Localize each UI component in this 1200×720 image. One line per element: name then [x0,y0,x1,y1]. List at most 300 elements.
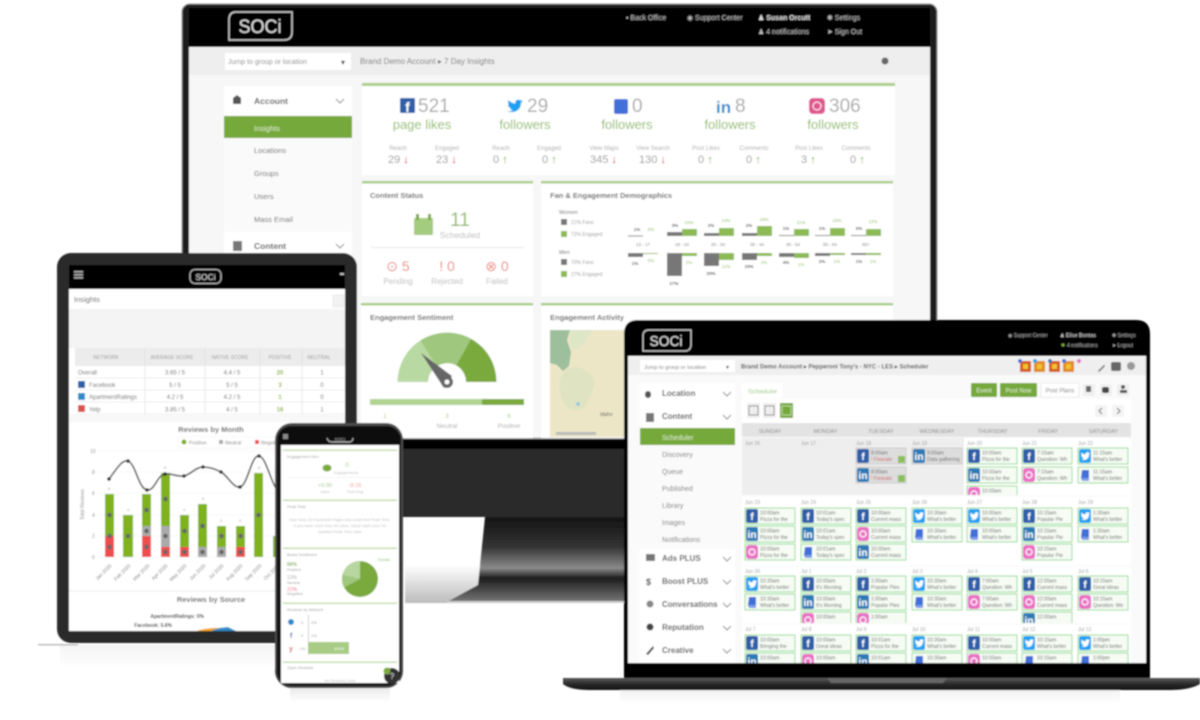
calendar week 1: Pizza for the [982,476,1010,482]
laptop sidebar: Creative [662,646,694,655]
tablet score table: NETWORK [93,355,119,361]
panel: content status: Pending [383,277,413,286]
laptop sidebar: $ [646,577,651,587]
panel: social stats: 0 ↑ [850,154,865,166]
panel: social stats: Engaged [435,146,459,152]
demographics labels: 27% [669,281,679,286]
calendar week 2: 10:00am [982,528,1001,534]
calendar week 4: 10:15am [1037,656,1056,662]
demographics labels: 2% [708,223,714,228]
tablet score table: Facebook [89,383,116,389]
calendar week 4: What's better [1037,644,1067,650]
tablet insights title [69,295,345,348]
chart month labels: Jan 2020 [95,563,114,582]
demographics labels: 13 - 17 [636,242,650,247]
calendar week 2: 10:01am [816,510,835,516]
tablet score table: 4.4 / 5 [224,370,241,376]
panel: social stats: 345 ↓ [590,154,617,166]
phone sentiment section: Positive [287,567,302,572]
demographics legend: Men [559,250,570,256]
tablet insights title: Insights [74,295,100,304]
tablet score table: POSITIVE [268,355,292,361]
chart axis: 6 [92,491,95,497]
demographics labels: 1% [783,226,789,231]
phone sentiment section: 13% [287,575,298,581]
calendar week 1: ! Fixscale [871,476,892,482]
tablet score table: 4 / 5 [226,408,238,414]
panel: social stats: Comments [841,146,871,152]
panel: social stats: 29 [527,96,548,117]
demographics labels: 15% [832,218,842,223]
laptop logo [643,330,691,351]
panel: social stats: followers [807,117,859,132]
calendar week 3: What's better [760,585,790,591]
chart legend: Positive [189,440,207,446]
calendar week 4: What's better [1093,644,1123,650]
calendar week 2: What's better [982,517,1012,523]
calendar week 2: Jun 26 [912,500,927,506]
calendar week 4: in [859,657,867,668]
calendar week 1: in [915,452,923,463]
calendar week 1: 7:15am [1037,450,1054,456]
phone reviews by network section [283,602,397,655]
demographics labels: 0% [648,258,654,263]
phone engagement section: Post Eng [347,489,363,494]
activity map [550,330,630,437]
laptop sidebar: Discovery [662,452,693,459]
panel: content status: ⊙ 5 [386,258,410,274]
panel: engagement activity [541,303,893,438]
chart bars: 8 [164,465,167,470]
phone peak time section: updated Peak Time data. [318,529,362,534]
calendar week 3: f [1083,580,1087,591]
phone engagement section: Engagements [334,470,358,475]
demographics legend: Women [559,210,578,216]
demographics labels: 2% [686,260,692,265]
phone reviews by network section: 0 [301,633,304,638]
laptop sidebar: Notifications [662,537,701,544]
phone reviews by network section: y [289,646,293,653]
monitor sidebar: Mass Email [254,215,293,224]
chart month labels: Apr 2020 [151,563,170,582]
demographics labels: 65+ [862,242,870,247]
calendar header row: SUNDAY [759,429,782,435]
calendar week 3: Jul 5 [1022,569,1033,575]
calendar week 3: What's better [760,603,790,609]
chart bars: 5 [202,496,205,501]
tablet score table: 5 / 5 [226,383,238,389]
panel: social stats: 0 [632,96,643,117]
chart month labels: Jul 2020 [208,563,226,581]
demographics legend [559,210,603,278]
panel: social stats: page likes [393,117,452,132]
calendar week 1: 8:00am [871,450,888,456]
demographics labels: 3% [672,223,678,228]
calendar week 3: 12:00am [1037,614,1056,620]
phone sentiment section: Brand Sentiment [287,552,318,557]
sentiment pie [342,561,378,597]
calendar week 2: 10:00am [760,528,779,534]
monitor sidebar: Content [254,241,286,251]
phone header: SOCi [335,437,345,442]
laptop alert icons [1018,359,1135,372]
calendar week 4: f [861,639,865,650]
calendar week 2: Current mass [871,535,902,541]
calendar week 2: f [1027,512,1031,523]
demographics labels: 45 - 54 [786,242,800,247]
phone sentiment section: 21% [287,587,298,593]
calendar week 3: f [861,580,865,591]
laptop sidebar: Boost PLUS [662,577,709,586]
panel: social stats: Post Likes [692,146,720,152]
panel: social stats: followers [704,117,756,132]
tablet score table: 4.2 / 5 [224,395,241,401]
tablet score table: 1 [278,395,282,401]
calendar week 2: 1:30am [1093,510,1110,516]
chart bars: 3 [239,518,242,523]
calendar week 4: Jul 7 [745,627,756,633]
laptop sidebar: Ads PLUS [662,554,701,563]
breadcrumb band [189,48,930,75]
calendar week 3: Jul 2 [856,569,867,575]
calendar week 3: 10:30am [927,578,946,584]
demographics labels: 1% [798,262,804,267]
calendar week 2: Today's spec [816,535,845,541]
calendar header row [742,423,1131,437]
tablet [57,253,357,643]
phone reviews by network section: f [290,633,293,640]
calendar week 2: Jun 27 [967,500,982,506]
calendar header row: FRIDAY [1038,429,1058,435]
calendar week 2: f [750,512,754,523]
monitor stand [405,517,650,603]
calendar week 3: f [1027,580,1031,591]
phone peak time section: If you have more than 30 Likes, check back soon for [294,523,387,528]
calendar week 3: Popular Pies [871,585,900,591]
calendar week 1: Jun 21 [1022,441,1037,447]
tablet score table: 0 [320,395,324,401]
calendar week 4: What's better [927,644,957,650]
calendar week 1: 11:15am [1093,450,1112,456]
monitor sidebar: Locations [254,146,286,155]
phone engagement section: 0 [345,463,349,469]
calendar week 2: 1:30am [1093,528,1110,534]
chart bars: 8 [258,465,261,470]
scheduler toolbar: Post Plans [1046,388,1074,394]
phone engagement section: +0.00 [318,483,332,489]
chart month labels: Feb 2020 [113,563,133,582]
calendar week 4: Jul 8 [801,627,812,633]
laptop sidebar: Conversations [662,600,718,609]
calendar week 2: 10:00am [982,510,1001,516]
monitor top navigation: ➤ Sign Out [827,29,862,36]
demographics labels: 2% [819,259,825,264]
calendar week 3: f [972,580,976,591]
calendar week 4: 10:01am [871,638,890,644]
panel: social stats: 23 ↓ [436,154,457,166]
calendar week 3: Jul 6 [1078,569,1089,575]
calendar week 2: 10:15am [1037,510,1056,516]
laptop breadcrumb band [628,357,1146,375]
breadcrumb band: Jump to group or location [228,59,307,66]
chart legend: Negative [261,440,281,446]
calendar week 4: Jul 12 [1022,627,1036,633]
panel: social stats: 0 ↑ [493,154,508,166]
panel: content status: ! 0 [439,258,455,274]
calendar week 2: Pizza for the [760,553,788,559]
phone engagement section [283,450,397,494]
calendar week 4: in [748,657,756,668]
calendar week 2: What's better [1093,535,1123,541]
phone reviews by network section: +31 [299,646,307,651]
calendar week 3: Jun 30 [745,569,760,575]
chart axis: 10 [90,449,96,455]
calendar week 3: Current mass [1037,603,1068,609]
tablet score table: 0 [320,383,324,389]
calendar week 1: 8:00am [871,470,888,476]
panel: content status: 11 [450,210,470,231]
chart axis [80,449,338,561]
calendar week 3: Jul 4 [967,569,978,575]
calendar week 4: 10:00am [816,656,835,662]
monitor sidebar: Insights [254,124,280,133]
tablet frame [57,253,357,643]
calendar week 2: Today's spec [816,553,845,559]
calendar week 4: 10:00am [982,638,1001,644]
panel: social stats: Post Likes [795,146,823,152]
calendar week 2: f [861,512,865,523]
panel: social stats: 0 ↑ [698,154,713,166]
calendar week 3: 10:30am [760,596,779,602]
phone reviews by network section: 0% [311,620,317,625]
calendar week 4 [744,626,1129,664]
demographics labels: 4% [783,260,789,265]
calendar week 4: f [972,639,976,650]
laptop sidebar: Scheduler [662,435,694,442]
demographics labels: 15% [744,264,754,269]
tablet score table: 3 [278,383,282,389]
phone help button [384,668,400,684]
demographics labels: 1% [834,259,840,264]
laptop breadcrumb band: ▾ [726,365,729,371]
phone reviews by network section: Reviews by Network [287,607,323,612]
laptop sidebar [640,383,735,663]
calendar header row: THURSDAY [978,429,1008,435]
phone reviews by network section: 100% [334,646,344,651]
calendar week 2: Jun 29 [1078,500,1093,506]
calendar week 2: Popular Pie [1037,517,1063,523]
calendar week 2: Current mass [871,517,902,523]
calendar week 3: 10:30am [760,578,779,584]
tablet score table: 3.65 / 5 [165,370,186,376]
demographics legend: 72% Engaged [571,232,603,238]
calendar week 2 [742,497,1131,565]
calendar week 1: Data gathering [927,457,960,463]
laptop breadcrumb band: Jump to group or location [644,365,706,371]
laptop breadcrumb band: Brand Demo Account ▸ Pepperoni Tony's - NYC - LES ▸ Scheduler [741,364,929,370]
tablet score table: 16 [277,408,284,414]
sentiment gauge [398,333,496,388]
calendar week 2: 10:15am [1037,528,1056,534]
chart month labels: Sep 2020 [244,563,264,583]
calendar week 4: Jul 9 [856,627,867,633]
calendar week 3: in [1025,616,1033,627]
phone sentiment section: Neutral [287,580,300,585]
chart axis: 0 [92,555,95,561]
tablet score table: ApartmentRatings [89,395,137,401]
calendar week 2: 10:00am [871,528,890,534]
calendar week 3: 1:00am [871,578,888,584]
calendar week 2: Jun 25 [856,500,871,506]
phone header [283,434,353,442]
phone open reviews section: No Reviews Data [325,678,356,683]
chart bars [105,465,282,557]
phone sentiment section: Negative [287,591,304,596]
panel: social stats: Engaged [537,146,561,152]
phone engagement section: -0.15 [349,483,361,489]
calendar week 4: 10:30am [927,638,946,644]
calendar week 4: Great ideas [816,644,842,650]
calendar week 1: f [972,452,976,463]
calendar week 3: 7:00am [982,596,999,602]
demographics labels: 0% [856,226,862,231]
phone engagement section: Likes [320,489,330,494]
calendar week 3: 10:00am [816,596,835,602]
laptop top navigation: ✱ Settings [1112,333,1136,339]
scheduler toolbar: Scheduler [748,388,778,396]
calendar week 2: Current mass [871,553,902,559]
calendar week 3: It's Morning [816,603,842,609]
calendar week 1: Jun 20 [967,441,982,447]
scheduler toolbar: Event [976,388,992,394]
chart: reviews by month [75,422,345,585]
laptop top navigation: 4 notifications [1067,343,1098,349]
laptop sidebar: Library [662,503,684,510]
calendar week 1: Question: Wh [1037,457,1068,463]
monitor top navigation: ◉ Support Center [687,15,743,22]
activity map: Idaho [600,412,613,418]
laptop top navigation: ➤ Logout [1112,343,1133,349]
panel: social stats: Reach [492,146,510,152]
calendar week 3: in [804,598,812,609]
calendar week 1: Jun 18 [856,441,871,447]
panel: fan and engagement demographics [541,181,893,296]
panel: social stats: 29 ↓ [388,154,409,166]
calendar week 2: 10:15am [1037,546,1056,552]
demographics labels: 25 - 34 [711,242,725,247]
demographics labels: 15% [684,220,694,225]
calendar week 2: in [748,530,756,541]
calendar week 3: 12:00am [1037,596,1056,602]
calendar week 1: What's better [1093,476,1123,482]
demographics labels: 12% [868,219,878,224]
demographics bars [628,226,881,276]
laptop top navigation: ◉ Support Center [1008,333,1048,339]
calendar week 3: in [859,598,867,609]
calendar week 2: 10:30am [927,510,946,516]
calendar week 3: 10:30am [927,596,946,602]
calendar header row: MONDAY [814,429,838,435]
calendar week 1: in [970,471,978,482]
demographics labels: 0% [648,227,654,232]
breadcrumb band: Brand Demo Account ▸ 7 Day Insights [360,57,495,66]
panel: social stats: Comments [739,146,769,152]
demographics labels: 55 - 64 [823,242,837,247]
monitor top navigation: ✱ Settings [827,14,861,22]
tablet score table: NATIVE SCORE [212,355,249,361]
calendar week 4: 10:30am [927,656,946,662]
calendar week 4: f [750,639,754,650]
phone sentiment section: 66% [287,562,298,568]
calendar week 4: Jul 11 [967,627,980,633]
panel: social stats: in [716,98,731,117]
monitor frame [182,4,937,517]
calendar week 1: in [859,471,867,482]
panel: social stats: 521 [418,96,450,117]
panel: engagement sentiment [361,303,533,438]
panel: social stats: followers [601,117,653,132]
demographics labels: 35 - 44 [750,242,764,247]
tablet score table: 1 [320,370,324,376]
calendar week 4: Bringing the [760,644,787,650]
calendar week 2: 10:00am [760,546,779,552]
laptop lid [624,320,1150,678]
laptop logo: SOCi [650,334,682,350]
panel: engagement sentiment: 1 [383,414,387,420]
panel: social stats: 130 ↓ [639,154,666,166]
calendar week 3: Jul 1 [801,569,812,575]
monitor top navigation: ♟ 4 notifications [758,28,810,36]
calendar header row: SATURDAY [1089,429,1118,435]
demographics labels: 19% [759,217,769,222]
tablet panel separator [69,414,345,422]
panel: social stats: View Search [636,146,670,152]
monitor top navigation: ▪ Back Office [626,15,666,22]
calendar week 4: 1:00pm [1093,656,1110,662]
calendar week 1: Jun 19 [912,441,927,447]
panel: social stats: View Maps [589,146,619,152]
chart axis: 8 [92,470,95,476]
demographics labels [632,217,878,286]
laptop sidebar: Reputation [662,623,704,632]
calendar week 4: Jul 13 [1078,627,1092,633]
panel: social stats: followers [499,117,551,132]
panel: content status: ⊗ 0 [485,258,509,274]
calendar week 3: 12:00am [1037,578,1056,584]
calendar week 1: Jun 22 [1078,441,1093,447]
laptop base [563,678,1200,690]
panel: reviews by source: Reviews by Source [177,595,245,604]
panel: content status: Scheduled [440,230,480,240]
monitor logo [229,12,292,40]
calendar week 2: Popular Pie [1037,535,1063,541]
phone frame [275,423,403,688]
phone open reviews section [283,662,397,683]
calendar week 2: Today's spec [816,517,845,523]
calendar week 2: Pizza for the [760,517,788,523]
panel: content status: Failed [486,277,508,286]
calendar week 1: 10:00am [982,470,1001,476]
calendar week 2: 10:01am [816,528,835,534]
chart legend [178,437,288,448]
monitor [182,4,937,603]
tablet score table: 1 [320,408,324,414]
tablet score table: 3.85 / 5 [165,408,186,414]
laptop top navigation [1008,333,1136,349]
panel: social stats: f [405,99,410,115]
calendar week 3: 10:00am [816,578,835,584]
chart bars: 6 [108,486,111,491]
